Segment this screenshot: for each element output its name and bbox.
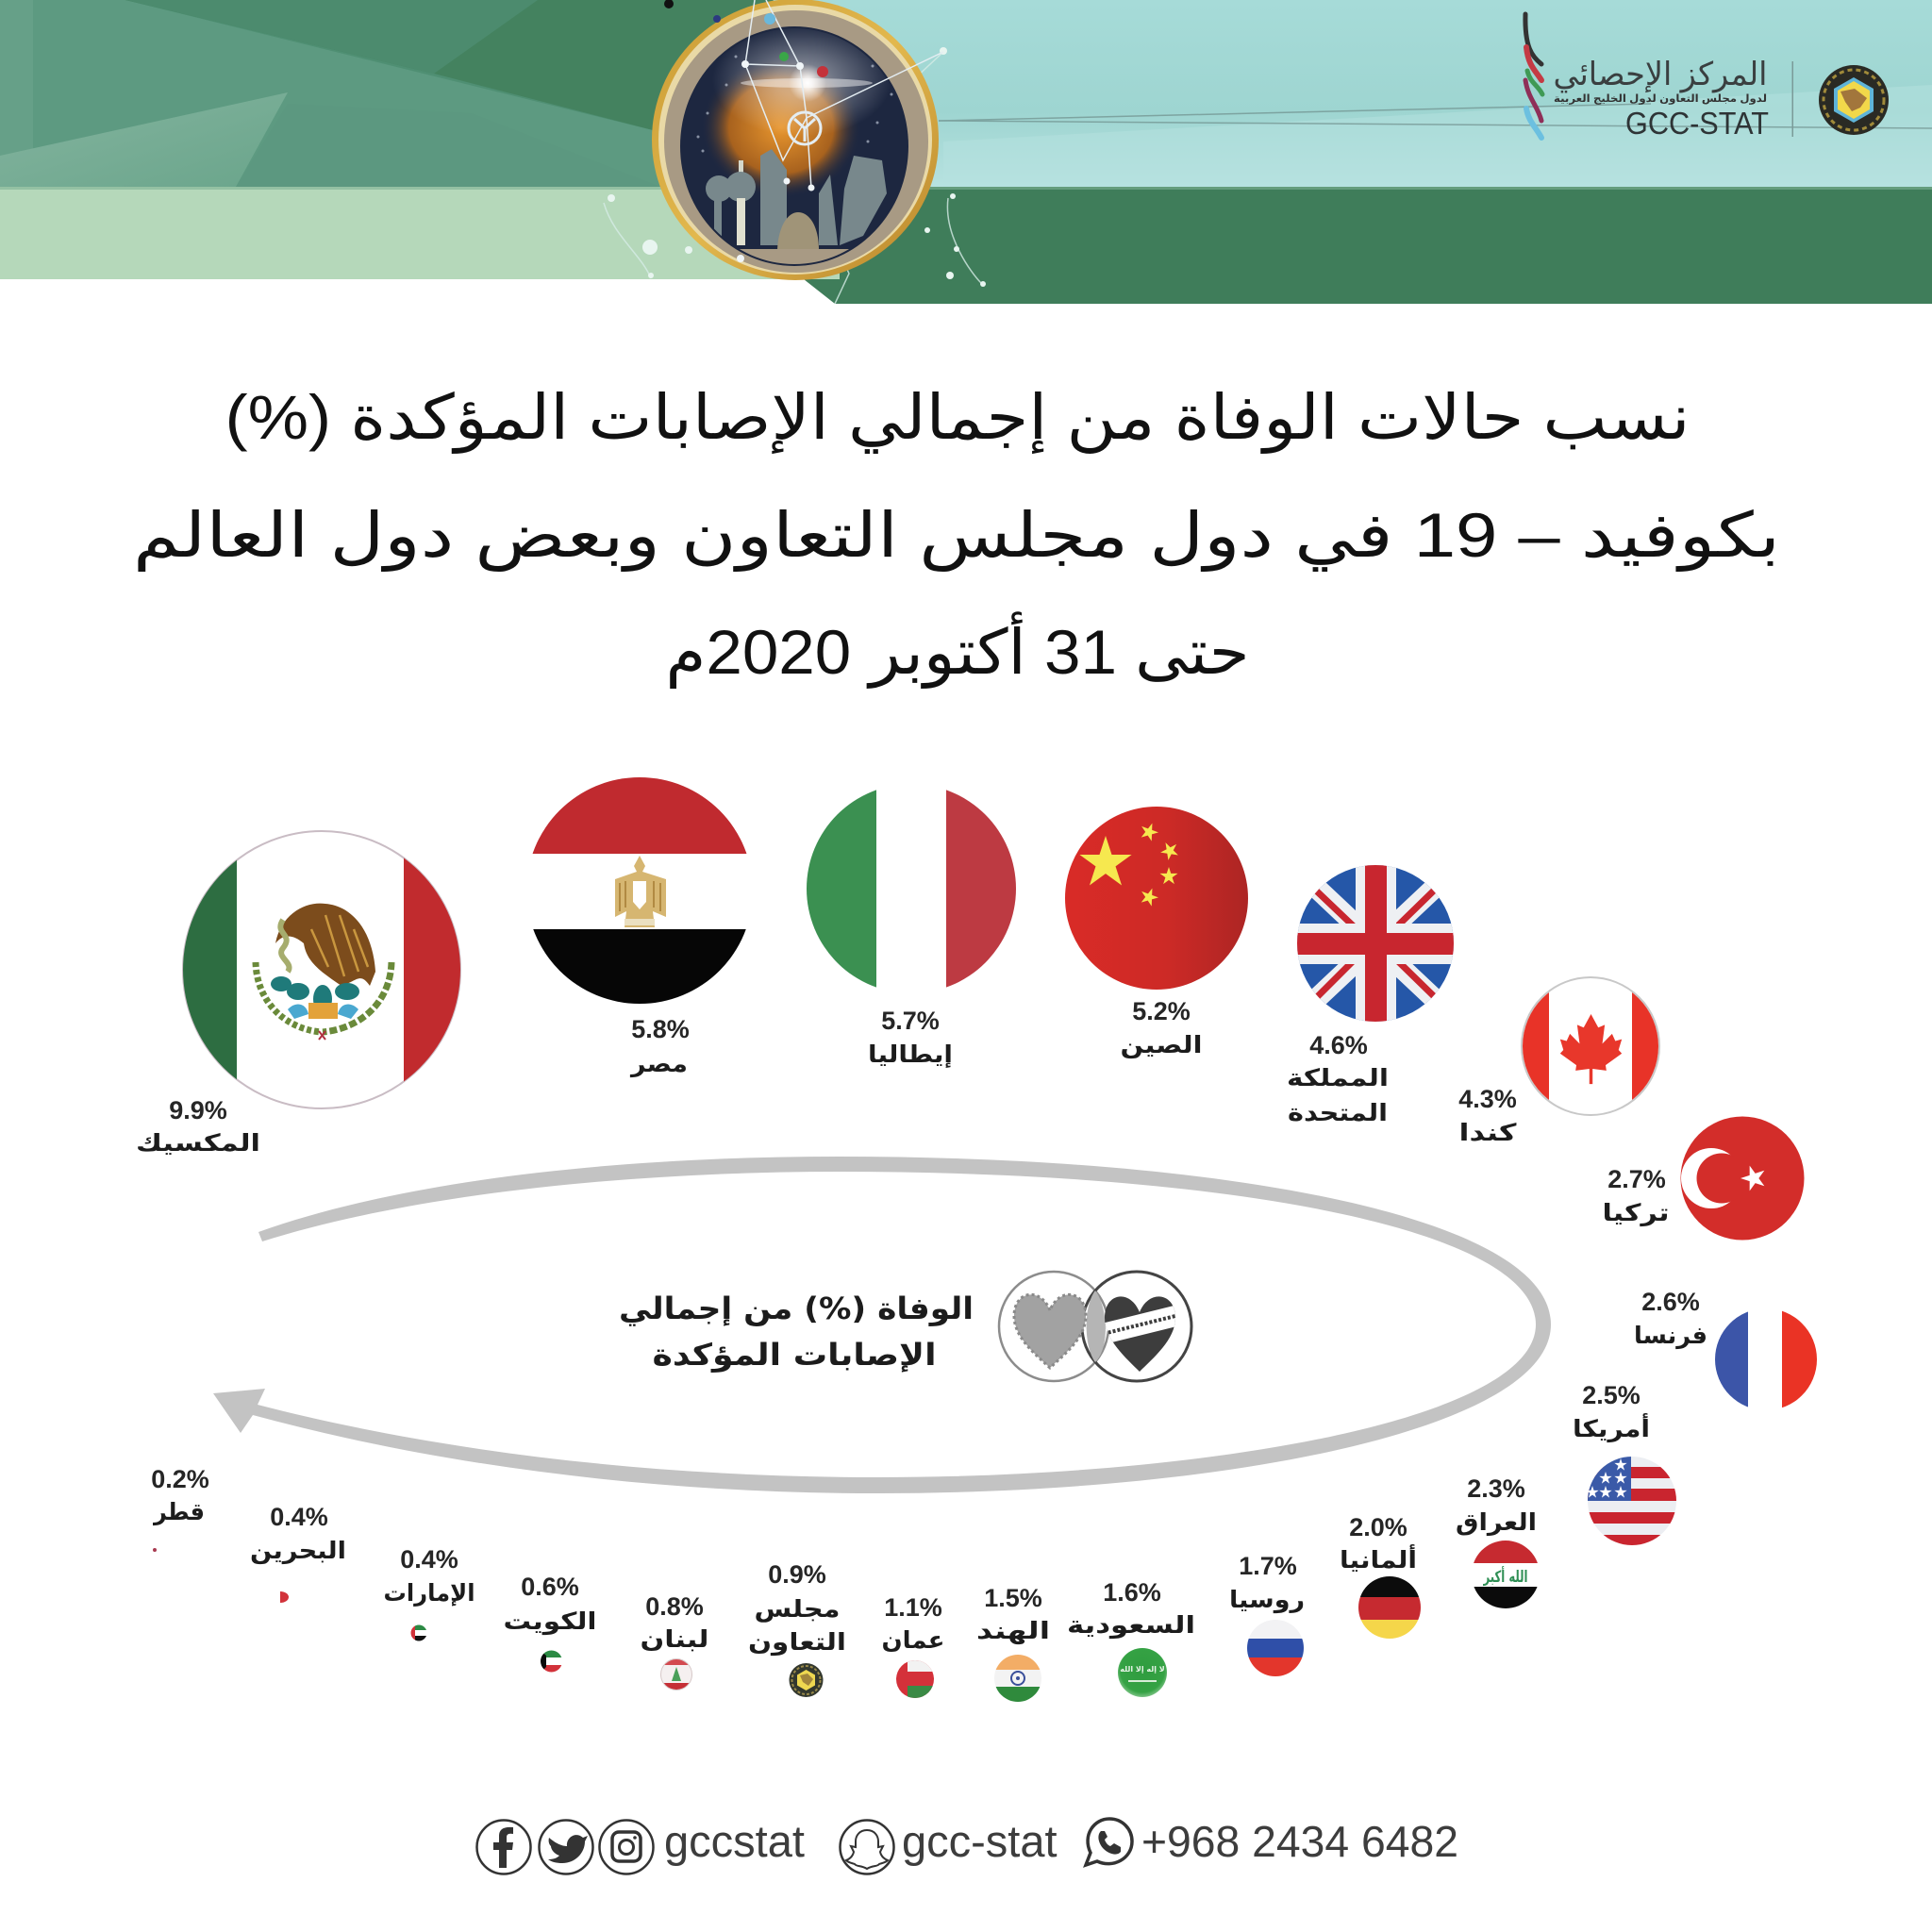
- icon: snapchat: [840, 1821, 894, 1874]
- country: United Kingdom: [1287, 858, 1462, 1126]
- medallion: [652, 0, 943, 280]
- icon: two hearts: [999, 1272, 1191, 1381]
- flag: Qatar: [153, 1548, 157, 1552]
- label: China: 5.2%: [1132, 997, 1191, 1025]
- label: Canada: كندا: [1458, 1119, 1517, 1146]
- logo english name: GCC-STAT: [1625, 106, 1769, 141]
- label: USA: أمريكا: [1573, 1413, 1650, 1443]
- label: Turkey: 2.7%: [1607, 1165, 1666, 1193]
- label: Kuwait: الكويت: [504, 1607, 596, 1636]
- flag: France: [1715, 1311, 1817, 1407]
- label: Qatar: قطر: [152, 1498, 205, 1526]
- country: Kuwait: [504, 1573, 596, 1674]
- network lines and nodes: [604, 52, 981, 304]
- label: United Kingdom: [1287, 1031, 1389, 1126]
- label: Italy: 5.7%: [881, 1007, 940, 1035]
- label: Bahrain: 0.4%: [270, 1503, 328, 1531]
- label: France: [1634, 1288, 1707, 1350]
- label: Iraq: [1456, 1474, 1537, 1537]
- country: France: [1636, 1292, 1817, 1407]
- label: Turkey: [1602, 1165, 1670, 1227]
- label: Canada: 4.3%: [1458, 1085, 1517, 1113]
- label: Bahrain: البحرين: [250, 1537, 346, 1565]
- arrow: circular gray arc: [213, 1157, 1551, 1493]
- country: Egypt: [532, 777, 747, 1077]
- label: Lebanon: [640, 1592, 709, 1653]
- country: India: [978, 1589, 1047, 1702]
- label: Kuwait: [504, 1573, 596, 1636]
- label: Kuwait: 0.6%: [521, 1573, 579, 1601]
- label: France: فرنسا: [1634, 1322, 1707, 1350]
- label: India: الهند: [976, 1617, 1050, 1645]
- flag: Bahrain: [280, 1591, 289, 1603]
- icon: GCC emblem: [1819, 65, 1889, 135]
- label: GCC: التعاون: [748, 1628, 846, 1657]
- country: GCC: [748, 1560, 846, 1697]
- flag: GCC emblem: [789, 1663, 823, 1697]
- flag: Saudi Arabia: لا إله إلا الله: [1120, 1665, 1165, 1674]
- label: Egypt: 5.8%: [631, 1015, 690, 1043]
- label: UAE: الإمارات: [383, 1579, 475, 1607]
- flag: India: [994, 1655, 1041, 1702]
- caption text: [619, 1291, 974, 1373]
- label: Oman: عمان: [881, 1626, 945, 1654]
- label: Iraq: 2.3%: [1467, 1474, 1525, 1503]
- label: Iraq: العراق: [1456, 1508, 1537, 1537]
- label: Bahrain: [250, 1503, 346, 1565]
- label: Saudi Arabia: السعودية: [1067, 1611, 1195, 1640]
- thin horizontal lines: [939, 104, 1932, 128]
- label: GCC: 0.9%: [768, 1560, 826, 1589]
- flag: Lebanon: [660, 1658, 692, 1691]
- label: Russia: [1229, 1552, 1305, 1614]
- label: Mexico: المكسيك: [136, 1129, 260, 1157]
- label: Qatar: 0.2%: [151, 1465, 209, 1493]
- handle: gccstat: gccstat: [664, 1816, 805, 1866]
- label: Oman: [881, 1593, 945, 1654]
- title line 3: حتى 31 أكتوبر 2020م: [666, 611, 1249, 689]
- logo arabic name: المركز الإحصائي: [1553, 57, 1768, 93]
- label: Germany: [1340, 1513, 1417, 1574]
- caption text: الوفاة (%) من إجمالي: [619, 1291, 974, 1327]
- country: Russia: [1231, 1557, 1304, 1676]
- label: Saudi Arabia: [1067, 1578, 1195, 1640]
- label: China: [1121, 997, 1202, 1059]
- label: United Kingdom: المملكة: [1287, 1064, 1389, 1091]
- country: USA: [1573, 1381, 1679, 1547]
- country: Italy: [802, 783, 1026, 1068]
- label: Egypt: [629, 1015, 690, 1078]
- buildings: [706, 149, 887, 245]
- label: France: 2.6%: [1641, 1288, 1700, 1316]
- icon: facebook: [477, 1821, 530, 1874]
- flag: Kuwait: [541, 1651, 562, 1672]
- label: India: [976, 1584, 1050, 1645]
- flag: Italy: [807, 790, 1016, 988]
- label: China: الصين: [1121, 1031, 1202, 1059]
- country: Canada: [1458, 976, 1660, 1141]
- country: Mexico: [136, 830, 465, 1157]
- flag: Egypt: [532, 777, 747, 1004]
- flag: Iraq: [1474, 1541, 1538, 1608]
- country: Qatar: [151, 1465, 209, 1552]
- flag: USA: [1588, 1457, 1676, 1545]
- label: Lebanon: 0.8%: [645, 1592, 704, 1621]
- label: United Kingdom: 4.6%: [1309, 1031, 1368, 1059]
- label: Qatar: [151, 1465, 209, 1526]
- label: GCC: مجلس: [755, 1595, 840, 1623]
- label: Germany: 2.0%: [1349, 1513, 1407, 1541]
- label: UAE: [383, 1545, 475, 1607]
- title line 2: بكوفيد – 19 في دول مجلس التعاون وبعض دول العالم: [133, 500, 1780, 573]
- flag: Turkey: [1681, 1117, 1804, 1240]
- flag: UAE: [411, 1624, 426, 1641]
- centre caption: [619, 1272, 1191, 1381]
- flag: Mexico: [179, 830, 465, 1113]
- handle: gcc-stat: gcc-stat: [902, 1816, 1058, 1866]
- logo arabic subtitle: لدول مجلس التعاون لدول الخليج العربية: [1554, 93, 1767, 105]
- footer contacts: [477, 1816, 1458, 1874]
- title line 1: نسب حالات الوفاة من إجمالي الإصابات المؤكدة (%): [225, 382, 1690, 455]
- country: China: [1065, 807, 1248, 1059]
- icon: twitter: [540, 1821, 592, 1874]
- title: [133, 382, 1780, 689]
- label: USA: 2.5%: [1582, 1381, 1641, 1409]
- label: Turkey: تركيا: [1602, 1199, 1670, 1227]
- label: Russia: 1.7%: [1239, 1552, 1297, 1580]
- phone number: +968 2434 6482: [1141, 1817, 1458, 1866]
- label: Germany: ألمانيا: [1340, 1544, 1417, 1574]
- label: USA: [1573, 1381, 1650, 1443]
- icon: whatsapp: [1086, 1819, 1132, 1865]
- label: Mexico: [136, 1096, 260, 1157]
- label: United Kingdom: المتحدة: [1288, 1099, 1388, 1126]
- label: UAE: 0.4%: [400, 1545, 458, 1574]
- label: India: 1.5%: [984, 1584, 1042, 1612]
- icon: instagram: [600, 1821, 653, 1874]
- label: Italy: [868, 1007, 953, 1068]
- flag: China: [1065, 807, 1248, 990]
- logo: GCC-STAT: [1525, 14, 1889, 141]
- header banner: [0, 0, 1932, 304]
- caption text: الإصابات المؤكدة: [653, 1337, 936, 1373]
- flag: Canada: [1521, 976, 1660, 1116]
- country: Saudi Arabia: [1067, 1578, 1195, 1697]
- label: GCC: [748, 1560, 846, 1657]
- label: Canada: [1458, 1085, 1517, 1146]
- label: Italy: إيطاليا: [868, 1041, 953, 1068]
- label: Saudi Arabia: 1.6%: [1103, 1578, 1161, 1607]
- country: Turkey: [1602, 1117, 1804, 1240]
- country: Germany: [1341, 1518, 1421, 1639]
- flag: Germany: [1358, 1576, 1421, 1639]
- flag: Iraq: الله أكبر: [1483, 1566, 1528, 1587]
- label: Egypt: مصر: [629, 1050, 688, 1078]
- country: Iraq: [1457, 1479, 1538, 1608]
- label: Russia: روسيا: [1229, 1586, 1305, 1614]
- country: Bahrain: [250, 1503, 346, 1603]
- country: UAE: [383, 1545, 475, 1641]
- label: Lebanon: لبنان: [640, 1625, 709, 1653]
- flag: Russia: [1247, 1620, 1304, 1676]
- icon: ribbon: [1525, 14, 1542, 138]
- flag: Oman: [896, 1660, 934, 1698]
- label: Oman: 1.1%: [884, 1593, 942, 1622]
- country: Lebanon: [641, 1597, 707, 1690]
- country: Oman: [883, 1598, 942, 1698]
- label: Mexico: 9.9%: [169, 1096, 227, 1124]
- flag: United Kingdom: [1297, 865, 1454, 1022]
